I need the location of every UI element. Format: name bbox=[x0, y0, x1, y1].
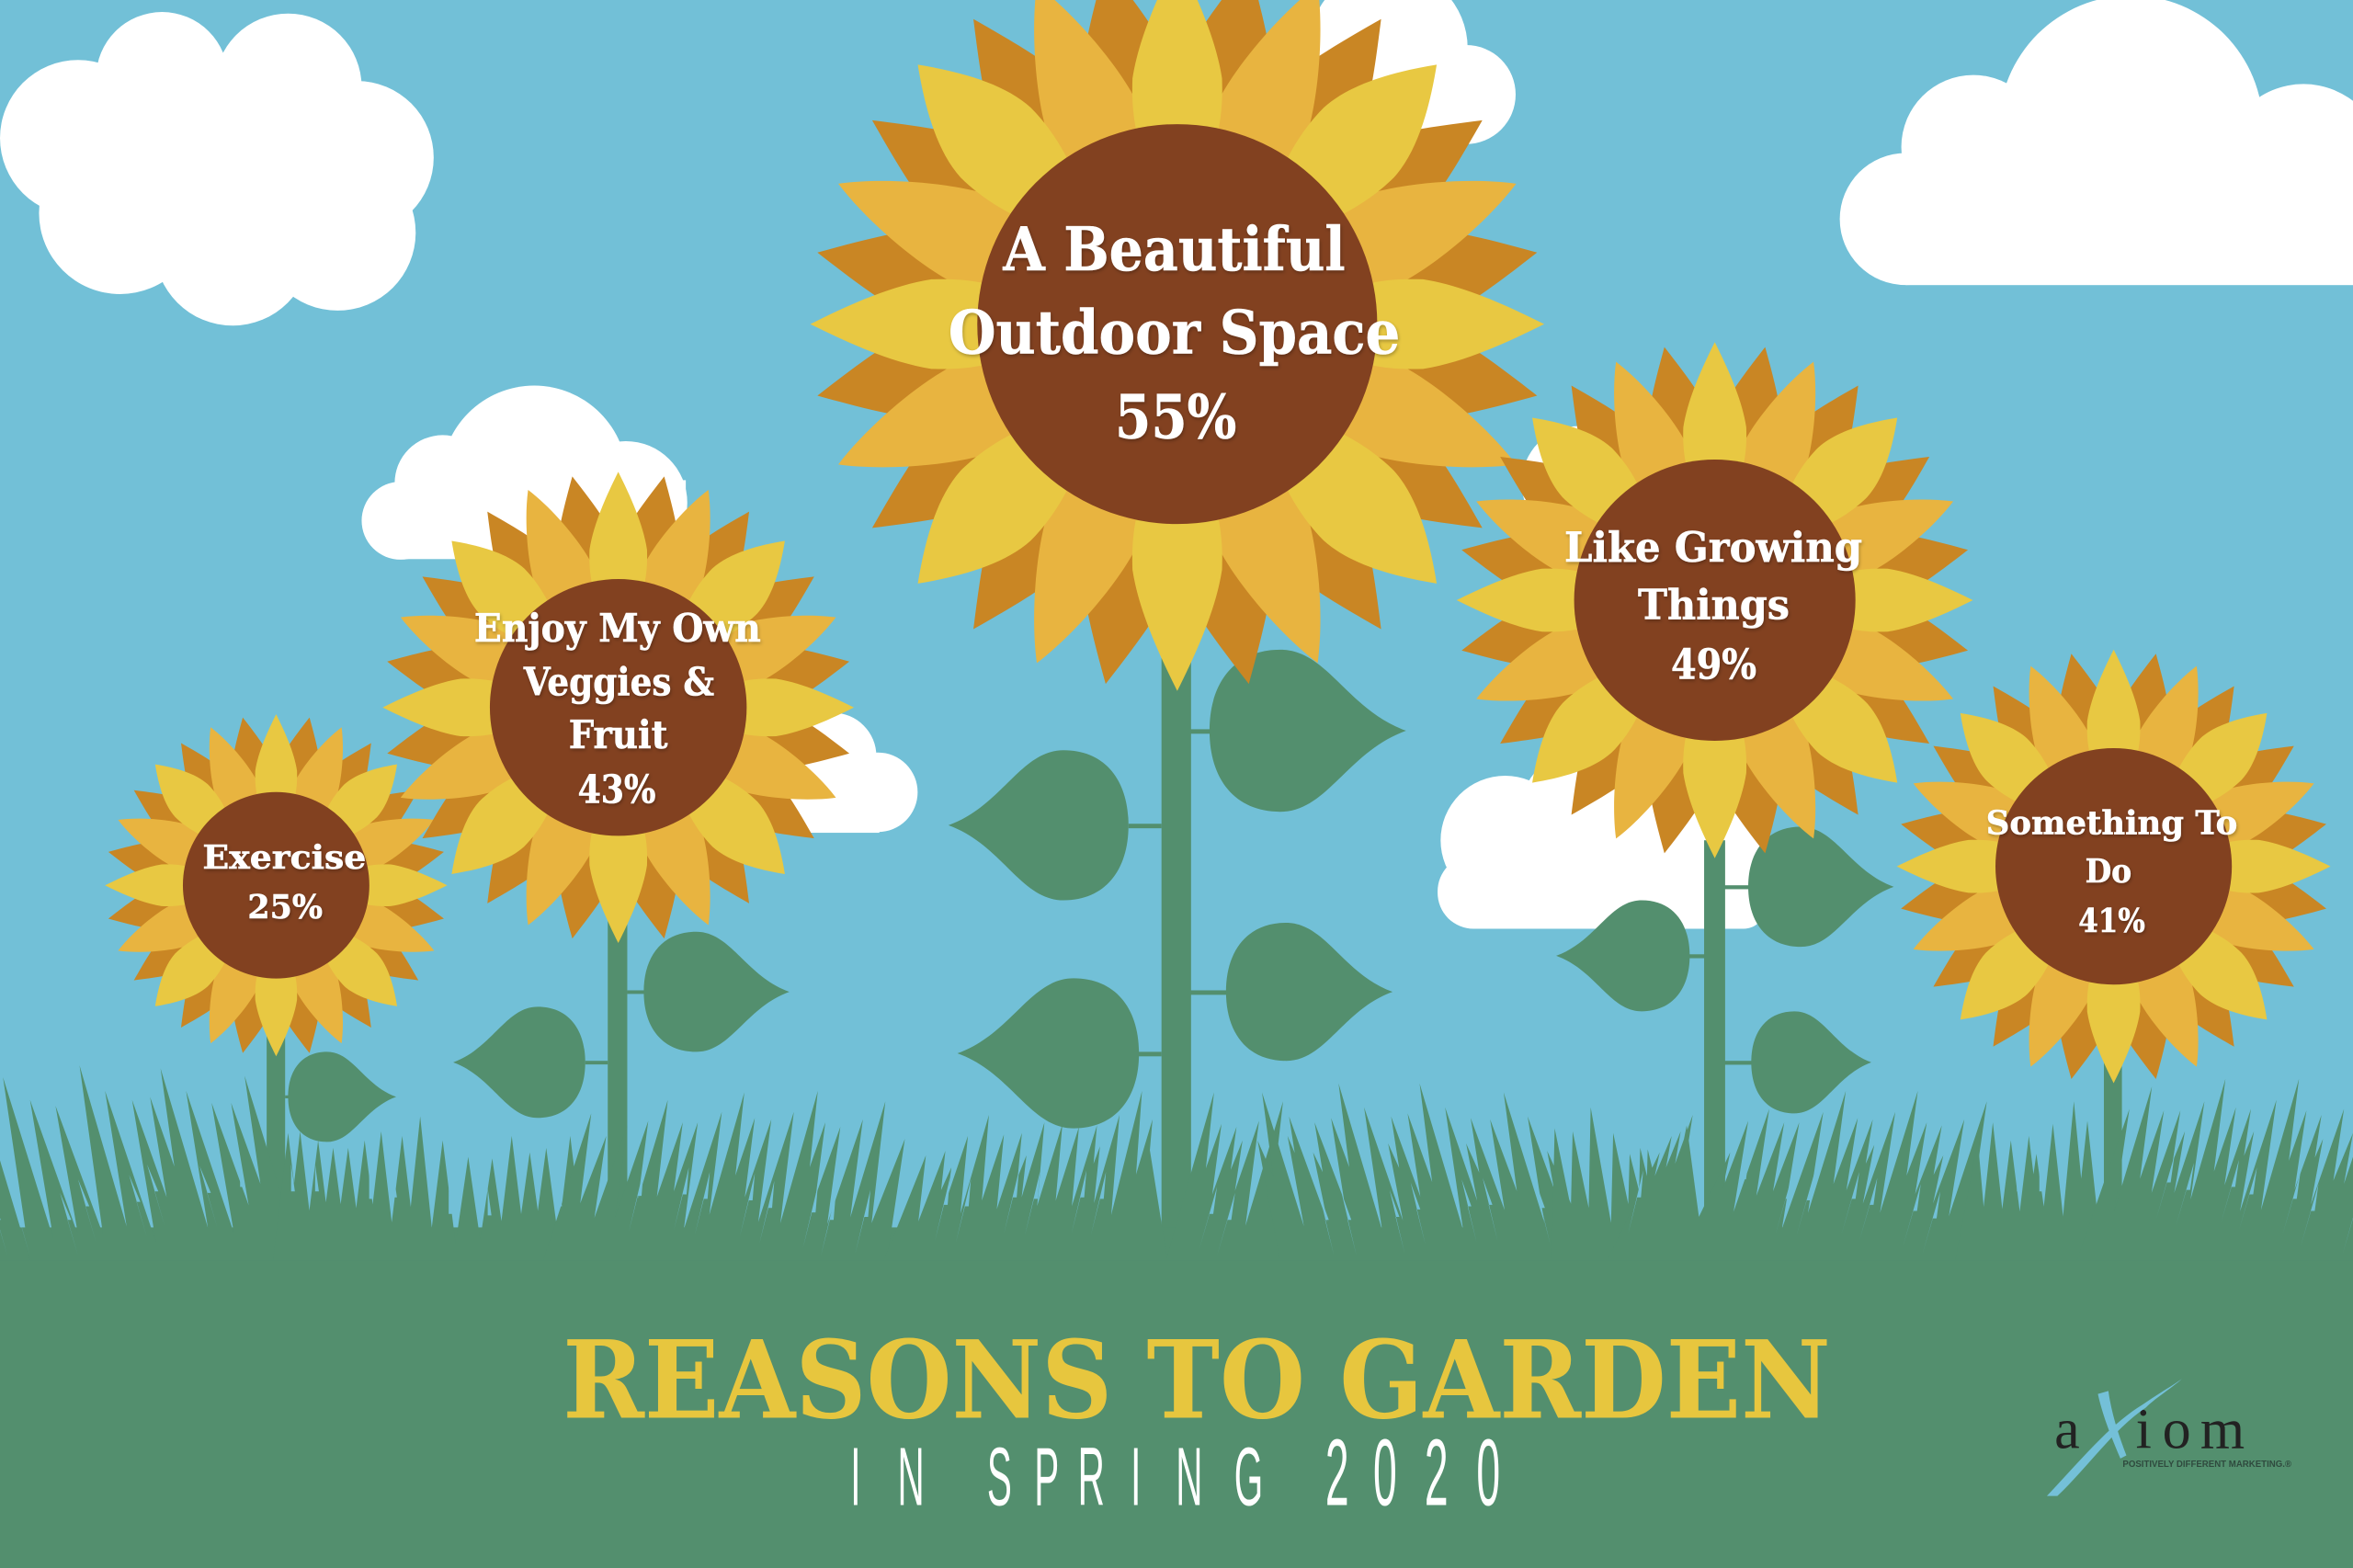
stem: something to do sunflower bbox=[2104, 1020, 2122, 1260]
sunflower: exercise 25% bbox=[104, 713, 449, 1057]
cloud: top left bbox=[0, 12, 434, 325]
sunflower: a beautiful outdoor space 55%: A Beautiful bbox=[1003, 215, 1346, 285]
logo: axiom: i bbox=[2136, 1398, 2152, 1460]
logo: axiom: a bbox=[2054, 1398, 2080, 1460]
stem and leaves: growing sunflower bbox=[1556, 827, 1893, 1260]
sunflower: something to do 41%: Do bbox=[2086, 852, 2131, 891]
subtitle: IN SPRING bbox=[850, 1430, 1263, 1523]
stem and leaves: vegetable sunflower bbox=[453, 901, 790, 1260]
sunflower: enjoy my own veggies and fruit 43%: Veggies & bbox=[523, 660, 714, 705]
subtitle bbox=[850, 1420, 1500, 1525]
logo: axiom: POSITIVELY DIFFERENT MARKETING.® bbox=[2122, 1460, 2291, 1470]
sunflower: like growing things 49% bbox=[1455, 341, 1974, 859]
sunflower: enjoy my own veggies and fruit 43% bbox=[381, 471, 855, 944]
stem and leaves: exercise sunflower bbox=[267, 960, 396, 1260]
title: REASONS TO GARDEN bbox=[563, 1317, 1831, 1444]
subtitle: 2020 bbox=[1325, 1420, 1500, 1525]
sunflower: enjoy my own veggies and fruit 43%: Fruit bbox=[569, 712, 668, 757]
sunflower: exercise 25%: Exercise bbox=[202, 838, 366, 877]
grass: narrow sky gaps between blades bbox=[0, 1153, 2353, 1256]
sunflower: something to do 41%: Something To bbox=[1986, 804, 2237, 843]
sunflower: a beautiful outdoor space 55%: 55% bbox=[1115, 383, 1236, 453]
cloud: top right bbox=[1840, 0, 2353, 285]
sunflower: enjoy my own veggies and fruit 43%: 43% bbox=[578, 767, 655, 812]
logo: axiom: m bbox=[2200, 1398, 2245, 1460]
sunflower: like growing things 49%: Things bbox=[1638, 581, 1790, 630]
logo: axiom: o bbox=[2163, 1398, 2191, 1460]
sunflower: enjoy my own veggies and fruit 43%: Enjoy My Own bbox=[474, 606, 761, 651]
logo: axiom bbox=[2047, 1379, 2291, 1496]
sunflower: like growing things 49%: 49% bbox=[1671, 641, 1756, 689]
cloud: behind the large sunflower bbox=[1290, 0, 1516, 150]
sunflower: something to do 41%: 41% bbox=[2078, 902, 2145, 940]
cloud: behind growing sunflower bbox=[1438, 426, 1765, 929]
sunflower: like growing things 49%: Like Growing bbox=[1564, 523, 1862, 572]
cloud: behind vegetable sunflower top bbox=[361, 386, 688, 572]
stem and leaves: large sunflower bbox=[949, 600, 1406, 1260]
sunflower: something to do 41% bbox=[1895, 648, 2332, 1085]
sunflower: a beautiful outdoor space 55% bbox=[808, 0, 1546, 693]
cloud: right of vegetable sunflower bbox=[766, 712, 917, 833]
grass ground and blades bbox=[0, 1065, 2353, 1568]
sunflower: exercise 25%: 25% bbox=[247, 888, 323, 926]
sunflower: a beautiful outdoor space 55%: Outdoor Space bbox=[949, 298, 1400, 368]
